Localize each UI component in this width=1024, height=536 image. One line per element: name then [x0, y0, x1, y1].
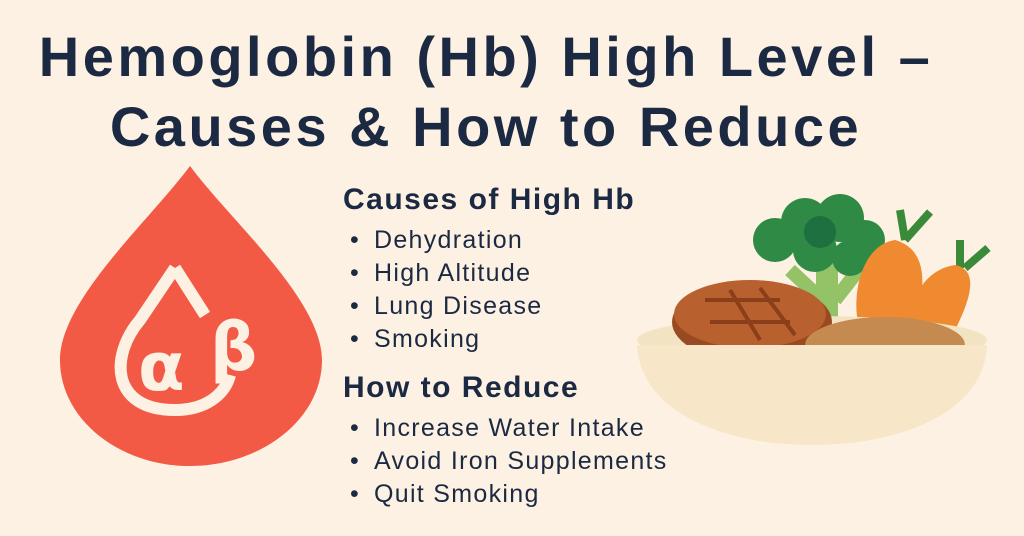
- title: [39, 25, 933, 158]
- icon: blood drop: α: [138, 328, 185, 407]
- title: Causes & How to Reduce: [110, 95, 862, 158]
- icon: blood drop: [60, 166, 322, 466]
- list: reduce: Avoid Iron Supplements: [374, 447, 668, 475]
- heading: how to reduce: How to Reduce: [343, 371, 579, 404]
- heading: causes: Causes of High Hb: [343, 183, 635, 216]
- icon: food bowl: [637, 194, 990, 445]
- icon: blood drop: β: [210, 309, 257, 386]
- list: causes: Smoking: [374, 325, 480, 353]
- list: causes: Lung Disease: [374, 292, 542, 320]
- list: reduce: Quit Smoking: [374, 480, 540, 508]
- list: reduce: [351, 414, 668, 508]
- list: causes: High Altitude: [374, 259, 531, 287]
- list: reduce: Increase Water Intake: [374, 414, 645, 442]
- list: causes: [351, 226, 542, 353]
- list: causes: Dehydration: [374, 226, 523, 254]
- title: Hemoglobin (Hb) High Level –: [39, 25, 933, 88]
